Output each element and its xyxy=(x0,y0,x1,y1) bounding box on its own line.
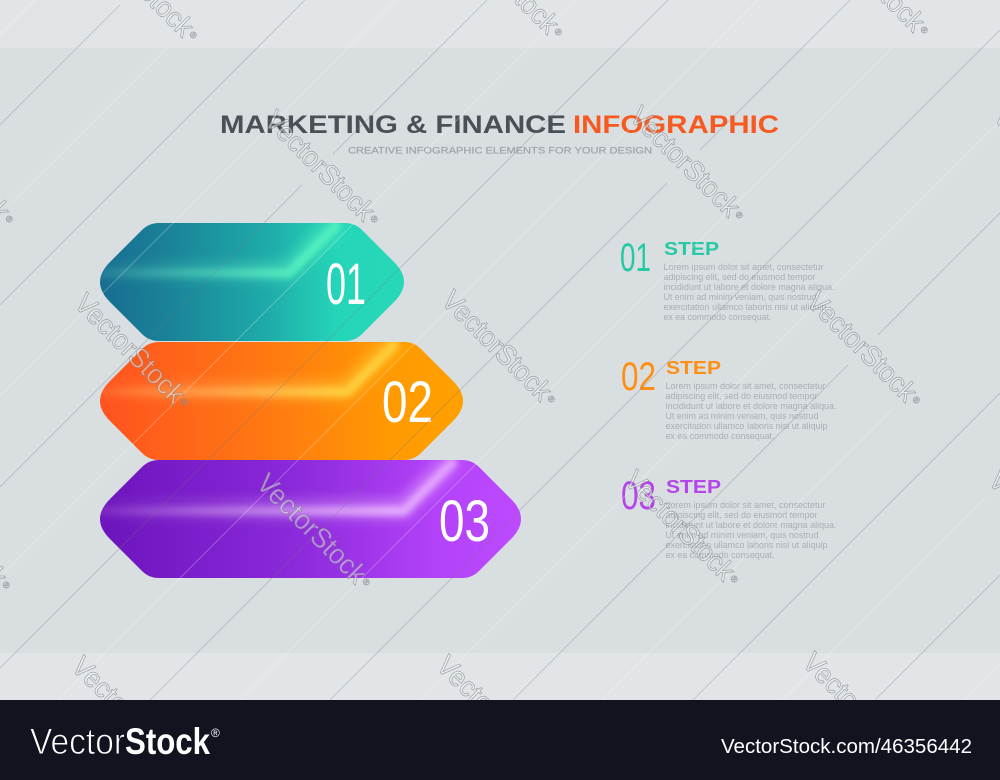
step 01 heading: STEP xyxy=(664,239,719,259)
footer bar xyxy=(0,700,1000,780)
text: ® xyxy=(0,579,12,591)
step 03 text: Ut enim ad minim veniam, quis nostrud xyxy=(666,530,818,541)
text: VectorStock xyxy=(436,284,559,407)
step 02 text xyxy=(666,381,836,442)
central background panel xyxy=(0,48,1000,653)
text: ® xyxy=(178,396,190,408)
step 03 text: exercitation ullamco laboris nisi ut aliquip xyxy=(666,540,828,551)
chart: stacked hexagonal bars xyxy=(95,221,521,578)
text: VectorStock xyxy=(624,100,747,223)
step 01 text: ex ea commodo consequat. xyxy=(664,312,772,323)
bar 01 number: 01 xyxy=(326,252,366,317)
step 01 text: adipiscing elit, sed do eiusmod tempor xyxy=(664,272,816,283)
text: ® xyxy=(733,209,745,221)
step 01 text xyxy=(664,262,834,323)
step 02 text: Ut enim ad minim veniam, quis nostrud xyxy=(666,411,818,422)
step 03 number: 03 xyxy=(621,474,656,518)
text: ® xyxy=(552,26,564,38)
step 01 number: 01 xyxy=(620,236,651,280)
text: VectorStock xyxy=(619,464,742,587)
text: ® xyxy=(3,213,15,225)
step 03 heading: STEP xyxy=(666,477,721,497)
step 02 heading: STEP xyxy=(666,358,721,378)
step 03 text: incididunt ut labore et dolore magna aliqua. xyxy=(666,520,836,531)
text: ® xyxy=(187,29,199,41)
text: VectorStock xyxy=(431,649,554,772)
text: VectorStock xyxy=(69,287,192,410)
text: VectorStock xyxy=(66,650,189,773)
step 02 text: exercitation ullamco laboris nisi ut aliquip xyxy=(666,421,828,432)
text: ® xyxy=(918,24,930,36)
step 01 text: incididunt ut labore et dolore magna aliqua. xyxy=(664,282,834,293)
footer image id: VectorStock.com/46356442 xyxy=(721,735,972,758)
footer logo: Stock xyxy=(125,721,210,762)
text: VectorStock xyxy=(797,646,920,769)
step 01 text: Ut enim ad minim veniam, quis nostrud xyxy=(664,292,816,303)
step 01 text: Lorem ipsum dolor sit amet, consectetur xyxy=(664,262,824,273)
title: MARKETING & FINANCE xyxy=(220,111,566,139)
bar 02 number: 02 xyxy=(382,370,433,435)
step 01 xyxy=(620,236,834,323)
text: ® xyxy=(545,393,557,405)
step 02 text: adipiscing elit, sed do eiusmod tempor xyxy=(666,391,818,402)
step 03 text xyxy=(666,500,836,561)
subtitle: CREATIVE INFOGRAPHIC ELEMENTS FOR YOUR DESIGN xyxy=(348,146,652,156)
step 03 text: adipiscing elit, sed do eiusmod tempor xyxy=(666,510,818,521)
bar 03 number: 03 xyxy=(439,489,490,554)
step 03 xyxy=(621,474,836,561)
step 03 text: Lorem ipsum dolor sit amet, consectetur xyxy=(666,500,826,511)
bar 03 purple xyxy=(95,458,521,578)
text: ® xyxy=(360,576,372,588)
step 02 text: incididunt ut labore et dolore magna aliqua. xyxy=(666,401,836,412)
step 02 number: 02 xyxy=(621,355,656,399)
footer logo xyxy=(30,721,220,762)
step 01 text: exercitation ullamco laboris nisi ut aliquip xyxy=(664,302,826,313)
step 03 text: ex ea commodo consequat. xyxy=(666,550,774,561)
title xyxy=(220,111,779,139)
text: VectorStock xyxy=(251,467,374,590)
step 02 text: ex ea commodo consequat. xyxy=(666,431,774,442)
footer logo: Vector xyxy=(30,721,125,762)
text: ® xyxy=(368,213,380,225)
bar 01 teal xyxy=(95,221,404,341)
bar 02 orange xyxy=(95,340,463,460)
step 02 xyxy=(621,355,836,442)
text: ® xyxy=(910,394,922,406)
title: INFOGRAPHIC xyxy=(573,111,779,139)
step 02 text: Lorem ipsum dolor sit amet, consectetur xyxy=(666,381,826,392)
text: VectorStock xyxy=(259,104,382,227)
text: VectorStock xyxy=(801,285,924,408)
text: ® xyxy=(728,573,740,585)
footer logo: ® xyxy=(211,726,220,740)
